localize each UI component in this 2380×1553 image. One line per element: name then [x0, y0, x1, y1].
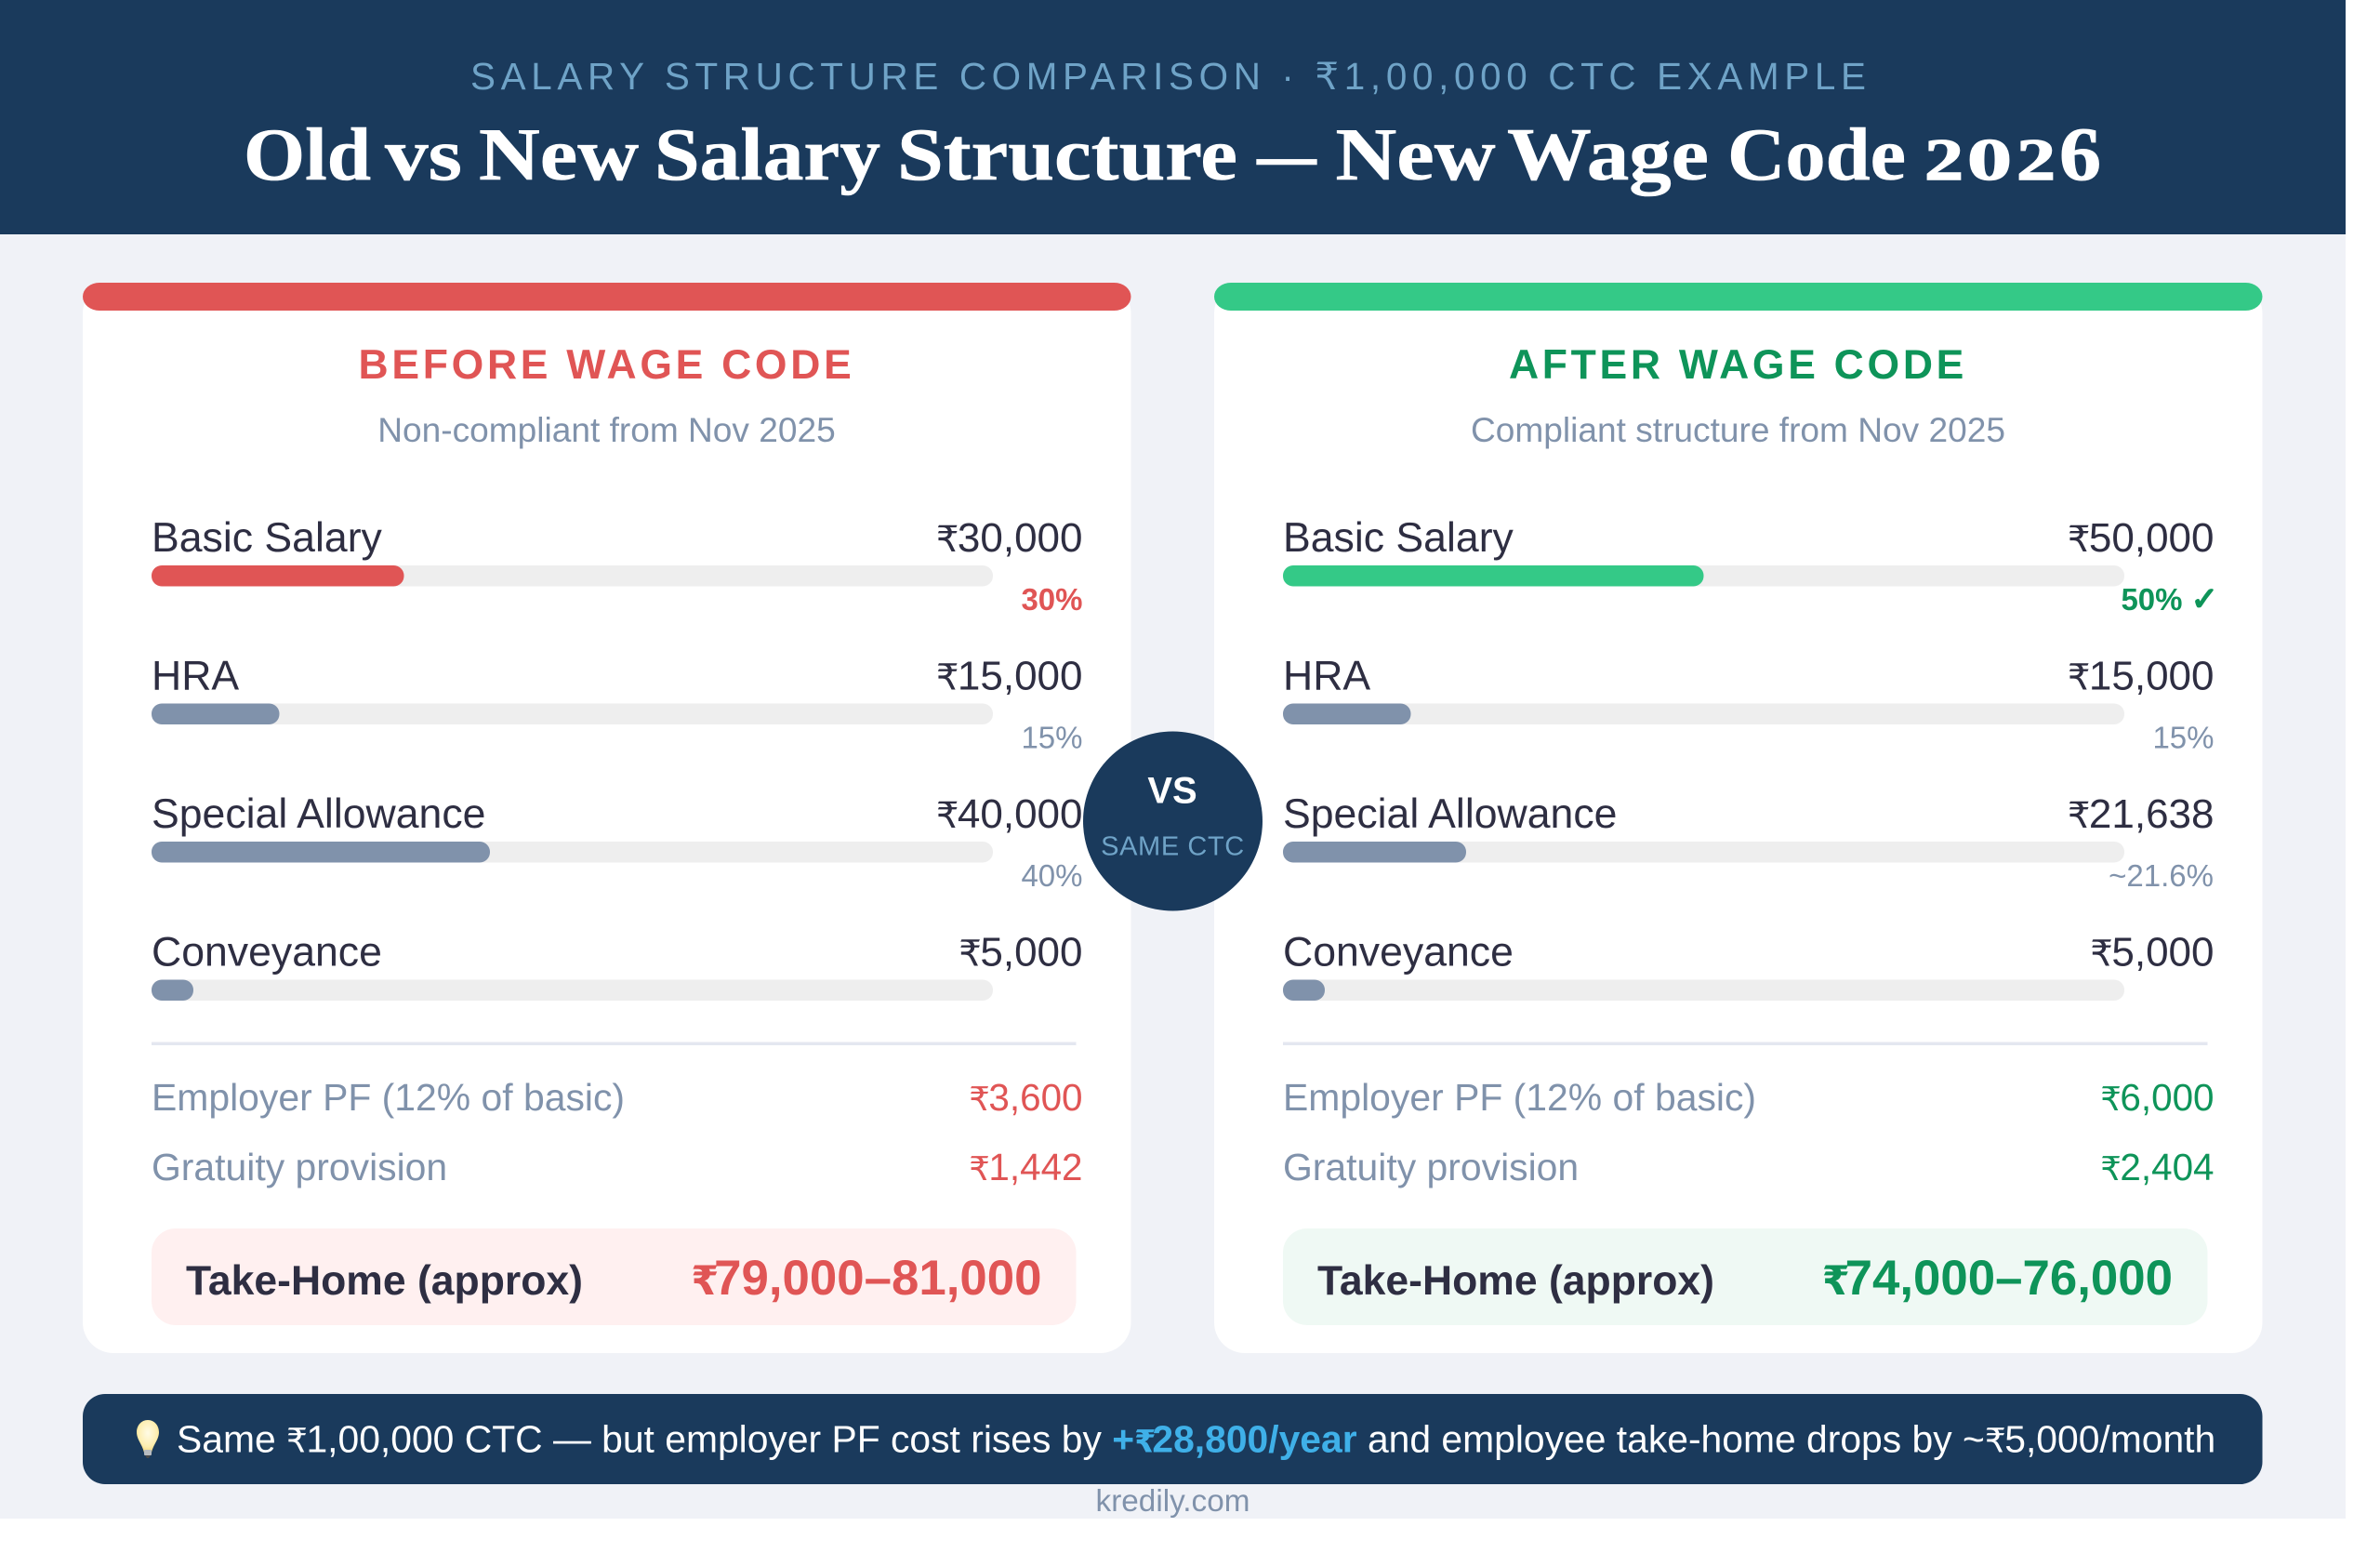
- row: special allowance before: [152, 791, 1082, 893]
- top accent bar: green: [1214, 283, 2263, 311]
- title: —: [1256, 114, 1317, 196]
- top accent bar: red: [83, 283, 1130, 311]
- title: New: [1335, 114, 1496, 196]
- employer pf after: ₹6,000: [2100, 1076, 2215, 1119]
- panel: after wage code: [1214, 283, 2263, 1353]
- row: basic salary before: Basic Salary: [152, 515, 383, 561]
- title: 0: [1967, 127, 2012, 192]
- row: basic salary after: Basic Salary: [1283, 515, 1514, 561]
- row: basic salary after: [1283, 515, 2218, 617]
- row: hra after: HRA: [1283, 653, 1370, 699]
- row: basic salary before: [152, 515, 1082, 617]
- callout text: Same ₹1,00,000 CTC — but employer PF cost rises by +₹28,800/year and employee take-home drops by ~₹5,000/month: [177, 1418, 2215, 1461]
- gratuity after: ₹2,404: [2100, 1146, 2215, 1188]
- row: basic salary after: ₹50,000: [2068, 515, 2215, 561]
- footer source: kredily.com: [1096, 1484, 1250, 1519]
- gratuity before: ₹1,442: [969, 1146, 1082, 1188]
- title: 2: [1924, 127, 1964, 192]
- row: hra before: ₹15,000: [936, 653, 1082, 699]
- title: New: [479, 114, 639, 196]
- row: special allowance before: Special Allowance: [152, 791, 485, 837]
- row: basic salary before: ₹30,000: [936, 515, 1082, 561]
- employer pf before: [152, 1076, 1082, 1119]
- take-home box before: ₹79,000–81,000: [691, 1251, 1041, 1306]
- row: special allowance after: [1283, 791, 2215, 893]
- gratuity before: Gratuity provision: [152, 1146, 447, 1188]
- row: conveyance before: [152, 930, 1082, 1001]
- row: hra after: ₹15,000: [2068, 653, 2215, 699]
- gratuity before: [152, 1146, 1082, 1188]
- title: 2: [2016, 127, 2056, 192]
- row: special allowance before: 40%: [1021, 858, 1082, 893]
- header eyebrow: SALARY STRUCTURE COMPARISON · ₹1,00,000 CTC EXAMPLE: [470, 55, 1871, 98]
- employer pf before: ₹3,600: [969, 1076, 1082, 1119]
- row: hra after: 15%: [2152, 720, 2215, 755]
- row: special allowance after: Special Allowance: [1283, 791, 1617, 837]
- panel: before wage code: [83, 283, 1130, 1353]
- row: special allowance before: ₹40,000: [936, 791, 1082, 837]
- take-home box after: Take-Home (approx): [1317, 1258, 1714, 1304]
- panel heading: after: AFTER WAGE CODE: [1509, 342, 1967, 388]
- vs badge: [1083, 731, 1263, 911]
- row: hra before: [152, 653, 1082, 755]
- employer pf after: [1283, 1076, 2215, 1119]
- vs badge: VS: [1147, 770, 1197, 811]
- title: Wage: [1507, 114, 1709, 196]
- row: hra after: [1283, 653, 2215, 755]
- gratuity after: [1283, 1146, 2215, 1188]
- employer pf before: Employer PF (12% of basic): [152, 1076, 625, 1119]
- row: special allowance after: ~21.6%: [2109, 858, 2214, 893]
- panel subtitle: before: Non-compliant from Nov 2025: [377, 410, 836, 449]
- row: hra before: 15%: [1021, 720, 1082, 755]
- title: Salary: [654, 114, 880, 196]
- row: hra before: HRA: [152, 653, 239, 699]
- title: Code: [1727, 114, 1906, 196]
- row: conveyance after: Conveyance: [1283, 930, 1514, 975]
- row: basic salary before: 30%: [1021, 582, 1082, 617]
- row: conveyance before: Conveyance: [152, 930, 382, 975]
- row: conveyance after: ₹5,000: [2090, 930, 2215, 975]
- gratuity after: Gratuity provision: [1283, 1146, 1579, 1188]
- row: conveyance before: ₹5,000: [959, 930, 1082, 975]
- title: Structure: [897, 114, 1237, 196]
- row: special allowance after: ₹21,638: [2068, 791, 2215, 837]
- take-home box before: Take-Home (approx): [186, 1258, 583, 1304]
- header band: [0, 0, 2346, 234]
- vs badge: SAME CTC: [1101, 831, 1245, 861]
- panel heading: before: BEFORE WAGE CODE: [359, 342, 854, 388]
- title: Old: [244, 114, 371, 196]
- take-home box after: [1283, 1228, 2207, 1325]
- icon: light bulb: [137, 1420, 159, 1458]
- panel subtitle: after: Compliant structure from Nov 2025: [1471, 410, 2005, 449]
- row: basic salary after: 50% ✓: [2121, 581, 2218, 617]
- bottom callout: [83, 1394, 2263, 1484]
- take-home box before: [152, 1228, 1077, 1325]
- take-home box after: ₹74,000–76,000: [1822, 1251, 2173, 1306]
- title: vs: [385, 114, 462, 196]
- title: 6: [2059, 112, 2101, 196]
- row: conveyance after: [1283, 930, 2215, 1001]
- employer pf after: Employer PF (12% of basic): [1283, 1076, 1756, 1119]
